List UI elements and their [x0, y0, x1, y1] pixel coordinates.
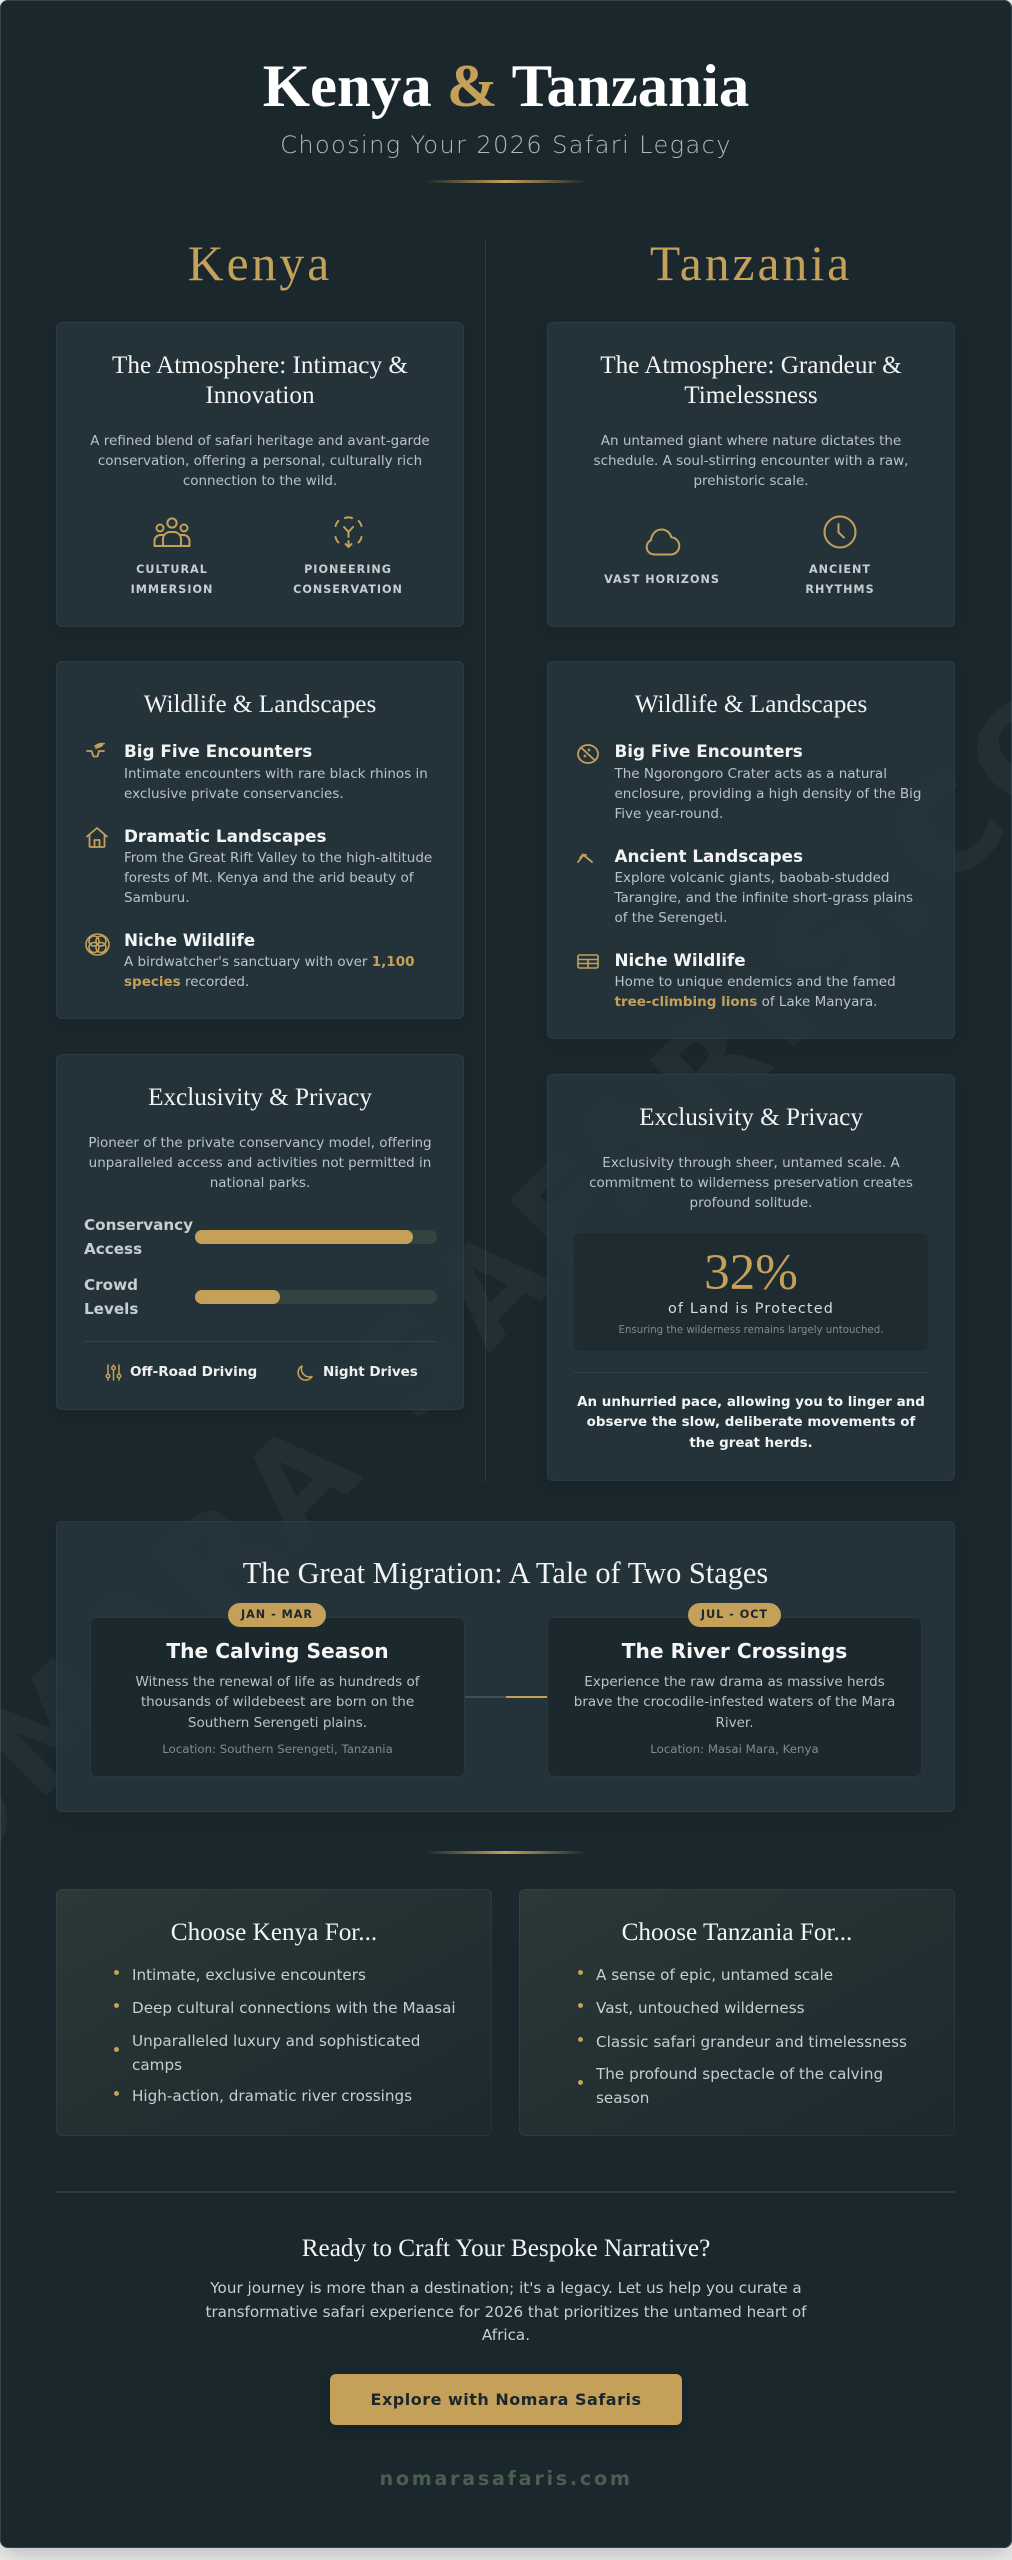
- date badge: [228, 1603, 326, 1627]
- call to action heading: Ready to Craft Your Bespoke Narrative?: [302, 2235, 710, 2262]
- heading: [600, 352, 902, 409]
- stage text: [574, 1674, 895, 1731]
- call to action text: Your journey is more than a destination; it's a legacy. Let us help you curate a: [210, 2279, 802, 2297]
- description: Exclusivity through sheer, untamed scale. A: [602, 1154, 900, 1170]
- description: unparalleled access and activities not permitted in: [89, 1155, 431, 1171]
- item title: Ancient Landscapes: [614, 846, 803, 866]
- stage location: Location: Southern Serengeti, Tanzania: [162, 1742, 393, 1756]
- bar label: conservancy access: [84, 1216, 193, 1258]
- stage text: [136, 1674, 420, 1731]
- icon: big five: [86, 742, 105, 758]
- icon: clock: [824, 516, 856, 548]
- item text: [124, 766, 428, 802]
- list: A sense of epic, untamed scale: [596, 1966, 833, 1984]
- label: vast horizons: VAST HORIZONS: [604, 573, 720, 586]
- stage text: Witness the renewal of life as hundreds of: [136, 1674, 420, 1690]
- heading: Wildlife & Landscapes: [144, 691, 376, 718]
- subtitle: Choosing Your 2026 Safari Legacy: [280, 131, 732, 159]
- item title: Niche Wildlife: [124, 930, 255, 950]
- panel: Kenya exclusivity and privacy: [56, 1054, 464, 1410]
- description: [594, 432, 908, 489]
- description: connection to the wild.: [183, 473, 337, 489]
- title: Kenya & Tanzania: [263, 53, 749, 120]
- item text: Samburu.: [124, 890, 190, 906]
- item text: From the Great Rift Valley to the high-altitude: [124, 850, 432, 866]
- list: Deep cultural connections with the Maasai: [132, 1999, 456, 2017]
- heading: The Atmosphere: Intimacy &: [112, 352, 408, 378]
- bar: crowd levels 35%: [195, 1290, 437, 1304]
- description: commitment to wilderness preservation creates: [589, 1175, 913, 1191]
- column heading: Tanzania: Tanzania: [650, 236, 852, 291]
- icon: cloud: [646, 528, 680, 556]
- stage text: Southern Serengeti plains.: [188, 1715, 367, 1731]
- label: cultural immersion: [131, 563, 213, 596]
- description: [589, 1154, 913, 1211]
- icon: moon: [297, 1365, 313, 1381]
- list: season: [596, 2089, 649, 2107]
- panel: Kenya atmosphere: [56, 322, 464, 627]
- item text: species recorded.: [124, 974, 249, 990]
- list: Unparalleled luxury and sophisticated: [132, 2032, 420, 2050]
- description: [88, 1134, 432, 1191]
- column heading: Kenya: Kenya: [188, 236, 332, 291]
- button: [330, 2374, 682, 2425]
- date badge: [688, 1603, 781, 1627]
- item text: Intimate encounters with rare black rhinos in: [124, 766, 428, 782]
- stage location: Location: Masai Mara, Kenya: [650, 1742, 819, 1756]
- list: Vast, untouched wilderness: [596, 1999, 805, 2017]
- icon: pioneering conservation: [334, 516, 362, 548]
- description: conservation, offering a personal, culturally rich: [98, 453, 422, 469]
- stage: calving season: [90, 1617, 465, 1777]
- stat box: 32% of land protected: [574, 1233, 928, 1351]
- call to action text: [205, 2279, 807, 2344]
- panel: Kenya wildlife and landscapes: [56, 661, 464, 1019]
- bar label: crowd levels: Levels: [84, 1300, 138, 1318]
- feature: off-road driving: Off-Road Driving: [130, 1364, 257, 1380]
- item title: Big Five Encounters: [614, 741, 803, 761]
- stat label: of Land is Protected: [668, 1301, 834, 1317]
- date badge: JUL - OCT: [701, 1608, 768, 1621]
- item title: Niche Wildlife: [614, 950, 746, 970]
- item title: Dramatic Landscapes: [124, 826, 327, 846]
- item text: exclusive private conservancies.: [124, 786, 344, 802]
- item text: [614, 974, 896, 1010]
- bar: conservancy access 90%: [195, 1230, 437, 1244]
- item text: Home to unique endemics and the famed: [614, 974, 896, 990]
- call to action text: transformative safari experience for 2026 that prioritizes the untamed heart of: [205, 2303, 807, 2321]
- description: prehistoric scale.: [693, 473, 809, 489]
- item text: Tarangire, and the infinite short-grass plains: [614, 890, 913, 906]
- label: ancient rhythms: [805, 563, 875, 596]
- closing statement: the great herds.: [689, 1436, 813, 1451]
- item text: tree-climbing lions of Lake Manyara.: [614, 994, 877, 1010]
- heading: [112, 352, 408, 409]
- panel: Tanzania exclusivity and privacy: [547, 1074, 955, 1481]
- call to action text: Africa.: [482, 2326, 530, 2344]
- item text: [124, 954, 414, 990]
- list: Classic safari grandeur and timelessness: [596, 2033, 907, 2051]
- list: camps: [132, 2056, 182, 2074]
- connector: [465, 1696, 547, 1698]
- stage text: River.: [715, 1715, 754, 1731]
- item text: Five year-round.: [614, 806, 723, 822]
- label: pioneering conservation: [293, 563, 403, 596]
- description: A refined blend of safari heritage and avant-garde: [90, 432, 430, 448]
- description: An untamed giant where nature dictates the: [601, 432, 901, 448]
- heading: The Atmosphere: Grandeur &: [600, 352, 902, 378]
- label: cultural immersion: IMMERSION: [131, 583, 213, 596]
- stage title: The Calving Season: [166, 1639, 389, 1663]
- item text: enclosure, providing a high density of the Big: [614, 786, 922, 802]
- bar label: conservancy access: Access: [84, 1240, 142, 1258]
- item text: [614, 870, 913, 926]
- description: Pioneer of the private conservancy model, offering: [88, 1134, 432, 1150]
- bar label: crowd levels: Crowd: [84, 1276, 138, 1294]
- heading: Choose Kenya For...: [171, 1918, 377, 1946]
- heading: Exclusivity & Privacy: [148, 1084, 372, 1111]
- panel: Tanzania wildlife and landscapes: [547, 661, 955, 1039]
- description: national parks.: [210, 1175, 310, 1191]
- closing statement: An unhurried pace, allowing you to linger and: [577, 1395, 925, 1410]
- feature: night drives: Night Drives: [323, 1364, 418, 1380]
- stat value: 32%: [704, 1244, 798, 1301]
- item text: A birdwatcher's sanctuary with over 1,100: [124, 954, 414, 970]
- bar label: conservancy access: Conservancy: [84, 1216, 193, 1234]
- heading: Innovation: [205, 382, 315, 409]
- label: ancient rhythms: ANCIENT: [809, 563, 871, 576]
- icon: crater: [577, 744, 599, 764]
- heading: Choose Tanzania For...: [622, 1918, 852, 1946]
- list: Intimate, exclusive encounters: [132, 1966, 366, 1984]
- icon: table: [577, 954, 599, 969]
- label: cultural immersion: CULTURAL: [136, 563, 208, 576]
- date badge: JAN - MAR: [241, 1608, 313, 1621]
- panel: Tanzania atmosphere: [547, 322, 955, 627]
- description: profound solitude.: [690, 1195, 812, 1211]
- button: Explore with Nomara Safaris: [371, 2390, 641, 2409]
- label: pioneering conservation: CONSERVATION: [293, 583, 403, 596]
- panel: choose Tanzania: [519, 1889, 955, 2136]
- list: [114, 1966, 456, 2105]
- heading: Exclusivity & Privacy: [639, 1104, 863, 1131]
- icon: cultural immersion: [154, 517, 190, 547]
- list: The profound spectacle of the calving: [596, 2065, 883, 2083]
- list: High-action, dramatic river crossings: [132, 2087, 412, 2105]
- item text: Explore volcanic giants, baobab-studded: [614, 870, 890, 886]
- item text: The Ngorongoro Crater acts as a natural: [614, 766, 887, 782]
- icon: rosette: [85, 933, 110, 956]
- description: [90, 432, 430, 489]
- label: pioneering conservation: PIONEERING: [304, 563, 392, 576]
- footer website: nomarasafaris.com: [379, 2467, 633, 2490]
- stage title: The River Crossings: [622, 1639, 847, 1663]
- icon: house: [86, 827, 108, 848]
- stage text: Experience the raw drama as massive herds: [584, 1674, 885, 1690]
- item text: [614, 766, 922, 822]
- heading: Timelessness: [684, 382, 818, 409]
- stage text: brave the crocodile-infested waters of the Mara: [574, 1694, 895, 1710]
- icon: off-road sliders: [106, 1364, 122, 1381]
- panel: the great migration: [56, 1521, 955, 1812]
- panel: choose Kenya: [56, 1889, 492, 2136]
- item text: [124, 850, 432, 906]
- item title: Big Five Encounters: [124, 741, 312, 761]
- closing statement: [577, 1395, 925, 1451]
- heading: The Great Migration: A Tale of Two Stages: [243, 1556, 768, 1590]
- stage text: thousands of wildebeest are born on the: [141, 1694, 414, 1710]
- description: schedule. A soul-stirring encounter with a raw,: [594, 453, 908, 469]
- heading: Wildlife & Landscapes: [635, 691, 867, 718]
- item text: forests of Mt. Kenya and the arid beauty of: [124, 870, 414, 886]
- closing statement: observe the slow, deliberate movements of: [587, 1415, 915, 1430]
- icon: peak: [577, 854, 593, 863]
- stat note: Ensuring the wilderness remains largely untouched.: [619, 1325, 883, 1336]
- label: ancient rhythms: RHYTHMS: [805, 583, 875, 596]
- stage: river crossings: [547, 1617, 922, 1777]
- list: [578, 1966, 907, 2107]
- item text: of the Serengeti.: [614, 910, 727, 926]
- bar label: crowd levels: [84, 1276, 138, 1318]
